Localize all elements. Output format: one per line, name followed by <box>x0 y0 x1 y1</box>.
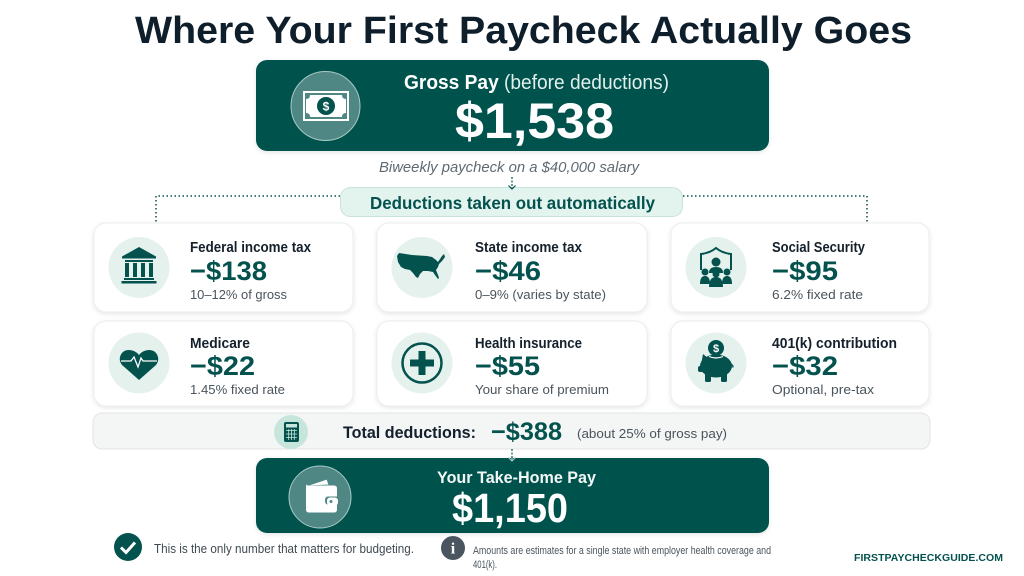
note: budgeting: This is the only number that matters for budgeting. <box>154 542 414 556</box>
icon: wallet <box>289 466 351 528</box>
panel: take-home pay <box>256 458 769 533</box>
card: federal income tax: −$138 <box>190 256 267 286</box>
icon: check mark <box>114 533 142 561</box>
card: medicare: −$22 <box>190 351 255 381</box>
icon: info <box>441 536 465 560</box>
arrow: total to take-home <box>508 449 516 461</box>
medicare text: Medicare <box>190 336 250 352</box>
federal text: Federal income tax <box>190 240 311 256</box>
arrow: gross pay to deductions <box>508 177 516 189</box>
icon: heart with pulse <box>108 332 170 394</box>
card: federal income tax <box>94 223 353 312</box>
icon: cash bill <box>291 72 360 140</box>
gross pay amount: $1,538 <box>455 93 614 149</box>
dotted bracket: deductions <box>156 196 867 222</box>
note: budgeting <box>114 533 414 561</box>
401k text: 401(k) contribution <box>772 336 897 352</box>
panel: gross pay <box>256 60 769 151</box>
brand: website: FIRSTPAYCHECKGUIDE.COM <box>854 552 1003 564</box>
icon: medical cross <box>392 332 452 394</box>
heading: deductions pill <box>340 188 682 216</box>
subtitle: salary note: Biweekly paycheck on a $40,000 salary <box>379 160 640 176</box>
icon: US map <box>392 237 452 298</box>
card: state income tax: −$46 <box>475 256 541 286</box>
total deductions note: (about 25% of gross pay) <box>577 426 727 441</box>
heading: deductions pill: Deductions taken out automatically <box>370 193 655 213</box>
icon: piggy bank <box>686 332 746 394</box>
title: Where Your First Paycheck Actually Goes <box>135 10 912 52</box>
note: estimates <box>441 536 771 571</box>
take-home label: Your Take-Home Pay <box>437 468 597 487</box>
icon: bank building <box>108 237 170 298</box>
card: medicare: 1.45% fixed rate <box>190 382 285 397</box>
card: health insurance <box>377 321 647 406</box>
card: health insurance: Your share of premium <box>475 382 609 397</box>
card: 401(k) contribution: Optional, pre-tax <box>772 382 875 397</box>
card: 401(k) contribution <box>671 321 929 406</box>
card: social security <box>671 223 929 312</box>
total deductions label: Total deductions: <box>343 423 476 442</box>
icon: shield with people <box>686 237 746 298</box>
icon: info: i <box>451 540 456 558</box>
take-home amount: $1,150 <box>452 485 568 531</box>
card: state income tax: 0–9% (varies by state) <box>475 287 606 302</box>
card: social security: 6.2% fixed rate <box>772 287 863 302</box>
icon: calculator <box>274 415 308 449</box>
total deductions amount: −$388 <box>491 418 562 446</box>
health insurance text: Health insurance <box>475 336 582 352</box>
gross pay label: Gross Pay (before deductions) <box>404 72 669 94</box>
card: social security: −$95 <box>772 256 838 286</box>
card: health insurance: −$55 <box>475 351 540 381</box>
social security text: Social Security <box>772 240 865 256</box>
note: estimates: 401(k). <box>473 559 497 571</box>
state text: State income tax <box>475 240 582 256</box>
card: federal income tax: 10–12% of gross <box>190 287 287 302</box>
card: medicare <box>94 321 353 406</box>
card: 401(k) contribution: −$32 <box>772 351 838 381</box>
note: estimates: Amounts are estimates for a single state with employer health coverage and <box>473 545 771 557</box>
card: state income tax <box>377 223 647 312</box>
icon: piggy bank: $ <box>713 343 719 355</box>
panel: total deductions <box>93 413 930 449</box>
icon: cash bill: $ <box>323 100 330 114</box>
